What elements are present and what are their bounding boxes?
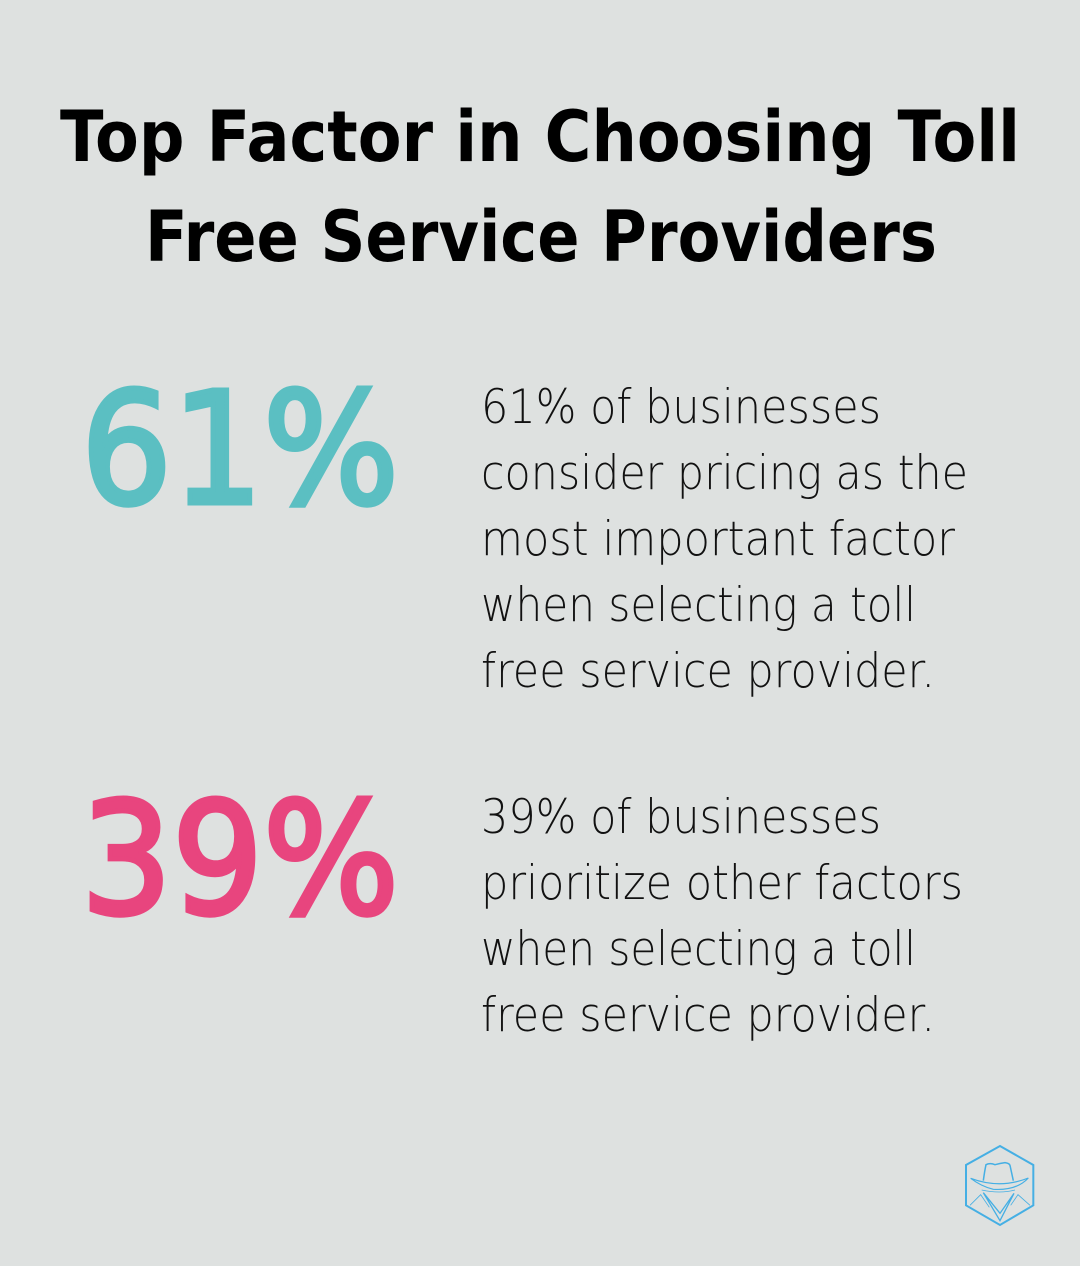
text block: 61% description: free service provider. <box>481 644 935 699</box>
text block: 61% description <box>481 380 968 699</box>
text block: 39% description <box>481 790 963 1043</box>
text block: 61% description: consider pricing as the <box>481 446 968 501</box>
stat: 61%: 61% <box>81 359 399 540</box>
text block: 39% description: when selecting a toll <box>481 922 916 977</box>
text block: 39% description: prioritize other factors <box>481 856 963 911</box>
text block: 61% description: most important factor <box>481 512 956 567</box>
text block: 61% description: when selecting a toll <box>481 578 916 633</box>
text block: 39% description: free service provider. <box>481 988 935 1043</box>
title <box>60 96 1020 278</box>
text block: 61% description: 61% of businesses <box>481 380 881 435</box>
icon: hexagon logo with hat and spy figure <box>966 1146 1033 1225</box>
title: Free Service Providers <box>145 196 937 278</box>
text block: 39% description: 39% of businesses <box>481 790 881 845</box>
stat: 39%: 39% <box>81 769 399 950</box>
